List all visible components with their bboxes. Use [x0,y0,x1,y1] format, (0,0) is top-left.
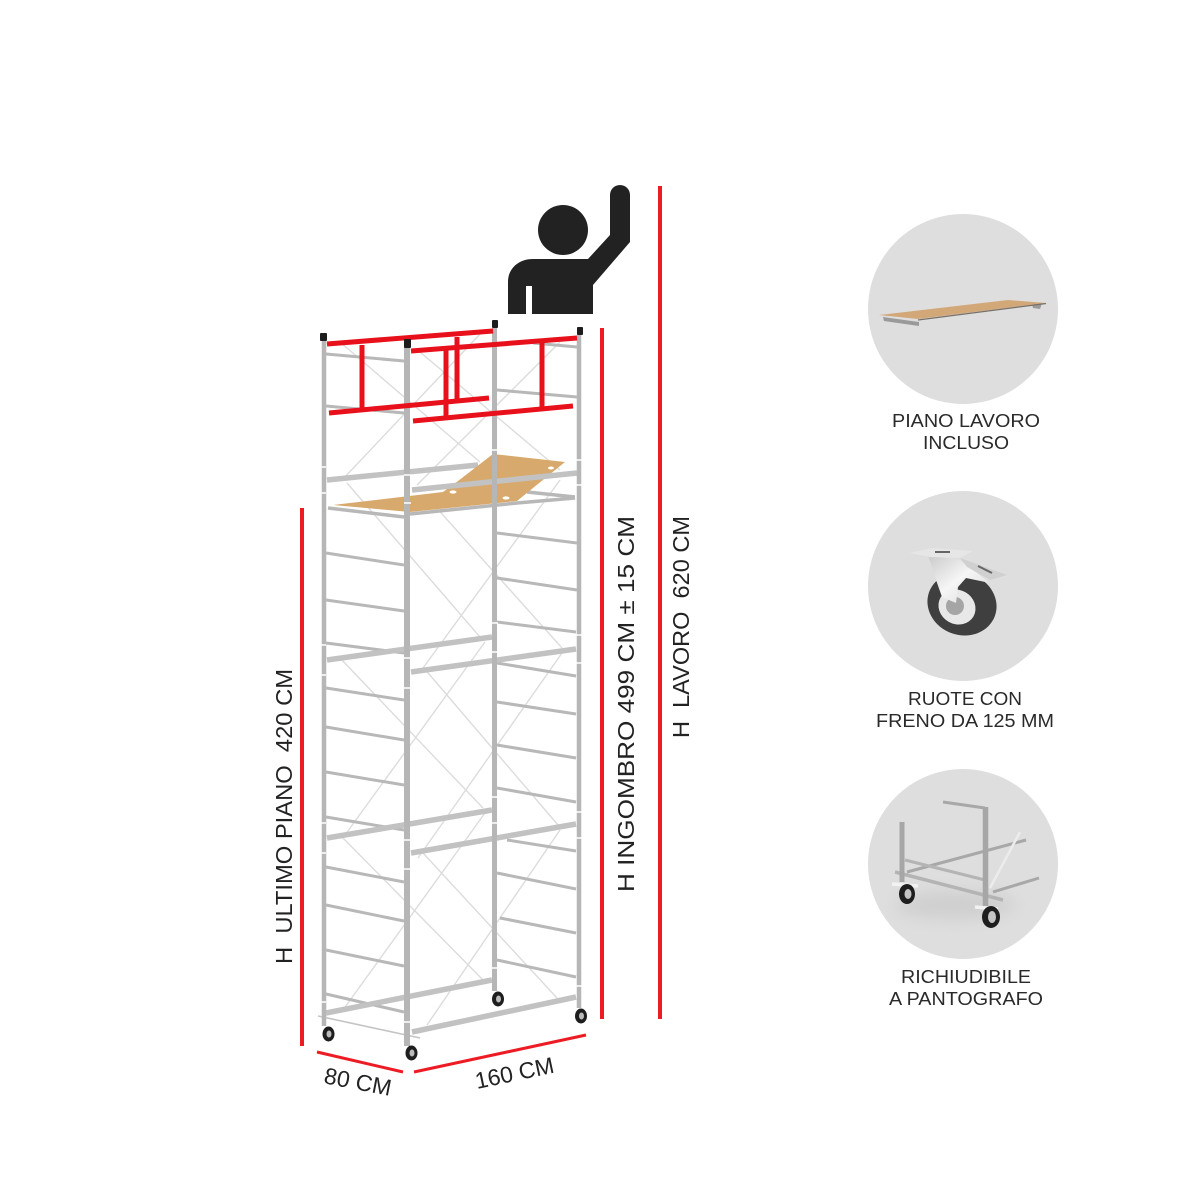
label: depth: 80 CM [322,1062,394,1101]
platform under frame [328,492,575,517]
red guardrails [327,331,577,421]
casters [322,992,587,1060]
rear horizontal rails [326,465,492,1013]
panel: platform feature [868,214,1058,453]
dimension line: depth [317,1052,403,1072]
panel: wheel feature [868,491,1058,731]
ladder rungs left frame [326,354,404,1012]
dimension line: top floor height [300,508,304,1046]
wooden platform plank [333,454,565,512]
bottom cross bar [318,1016,420,1038]
infographic canvas [276,185,1058,1096]
caption: A PANTOGRAFO [889,989,1043,1009]
caption: PIANO LAVORO [892,411,1040,431]
dimension line: working height [658,186,662,1019]
caption: RUOTE CON [908,689,1022,709]
feature circle [868,214,1058,404]
label: top floor height: H ULTIMO PIANO 420 CM [271,669,297,964]
caption: FRENO DA 125 MM [876,711,1054,731]
front horizontal rails [411,473,577,1032]
post end caps [320,320,583,348]
diagonal braces [340,332,562,1025]
label: overall height: H INGOMBRO 499 CM ± 15 CM [613,516,639,892]
dimension line: overall height [600,328,604,1019]
feature circle [868,491,1058,681]
feature circle [868,769,1058,959]
image: folding pantograph base [892,802,1039,928]
image: platform board [879,300,1046,326]
caption: INCLUSO [923,433,1009,453]
dimension line: width [414,1035,586,1072]
post collars [320,450,582,1022]
label: width: 160 CM [473,1052,556,1094]
image: braked caster wheel [910,548,1007,645]
scaffold tower [318,320,587,1060]
icon: person raising arm [508,185,630,314]
vertical posts [324,328,579,1046]
platform holes [450,466,554,500]
floor shadow [904,892,1006,918]
panel: folding feature [868,769,1058,1009]
caption: RICHIUDIBILE [901,967,1031,987]
ladder rungs right frame [497,343,577,977]
label: working height: H LAVORO 620 CM [668,516,694,738]
